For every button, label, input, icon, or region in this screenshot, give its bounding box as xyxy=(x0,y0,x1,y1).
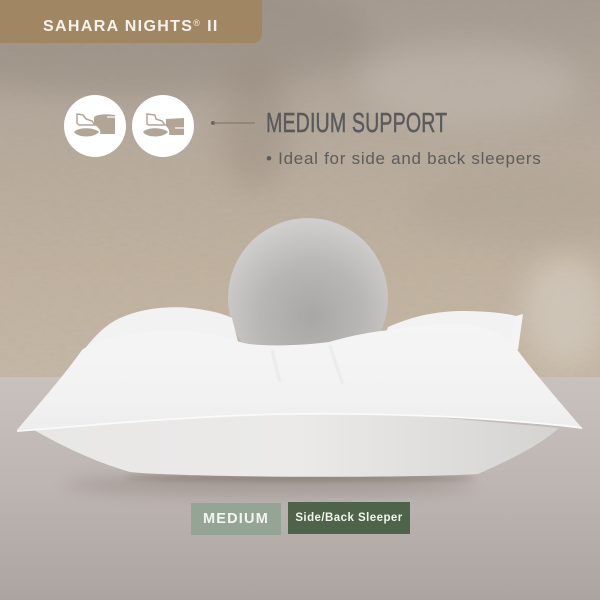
pillow crease xyxy=(272,345,343,384)
heading: MEDIUM SUPPORT xyxy=(266,107,447,138)
badge: medium: MEDIUM xyxy=(203,511,269,527)
wall xyxy=(0,0,600,377)
pillow xyxy=(17,307,582,477)
pillow seam xyxy=(17,414,582,431)
floor xyxy=(0,377,600,600)
brand name: SAHARA NIGHTS® II xyxy=(43,18,219,35)
icon: side sleeper xyxy=(64,95,126,157)
pillow back lobes xyxy=(80,307,516,355)
wall shadows xyxy=(0,0,600,365)
pillow back ruffle xyxy=(510,314,523,350)
icon: back sleeper xyxy=(132,95,194,157)
sphere xyxy=(228,218,388,378)
pillow shadow xyxy=(65,475,475,495)
pillow front face xyxy=(17,324,582,430)
badge: medium xyxy=(191,503,281,535)
connector line xyxy=(211,121,255,125)
pillow lower flank xyxy=(34,405,559,477)
badge: side/back sleeper: Side/Back Sleeper xyxy=(295,512,403,524)
badge: side/back sleeper xyxy=(288,502,410,534)
brand tab xyxy=(0,0,262,43)
description: • Ideal for side and back sleepers xyxy=(266,149,542,168)
